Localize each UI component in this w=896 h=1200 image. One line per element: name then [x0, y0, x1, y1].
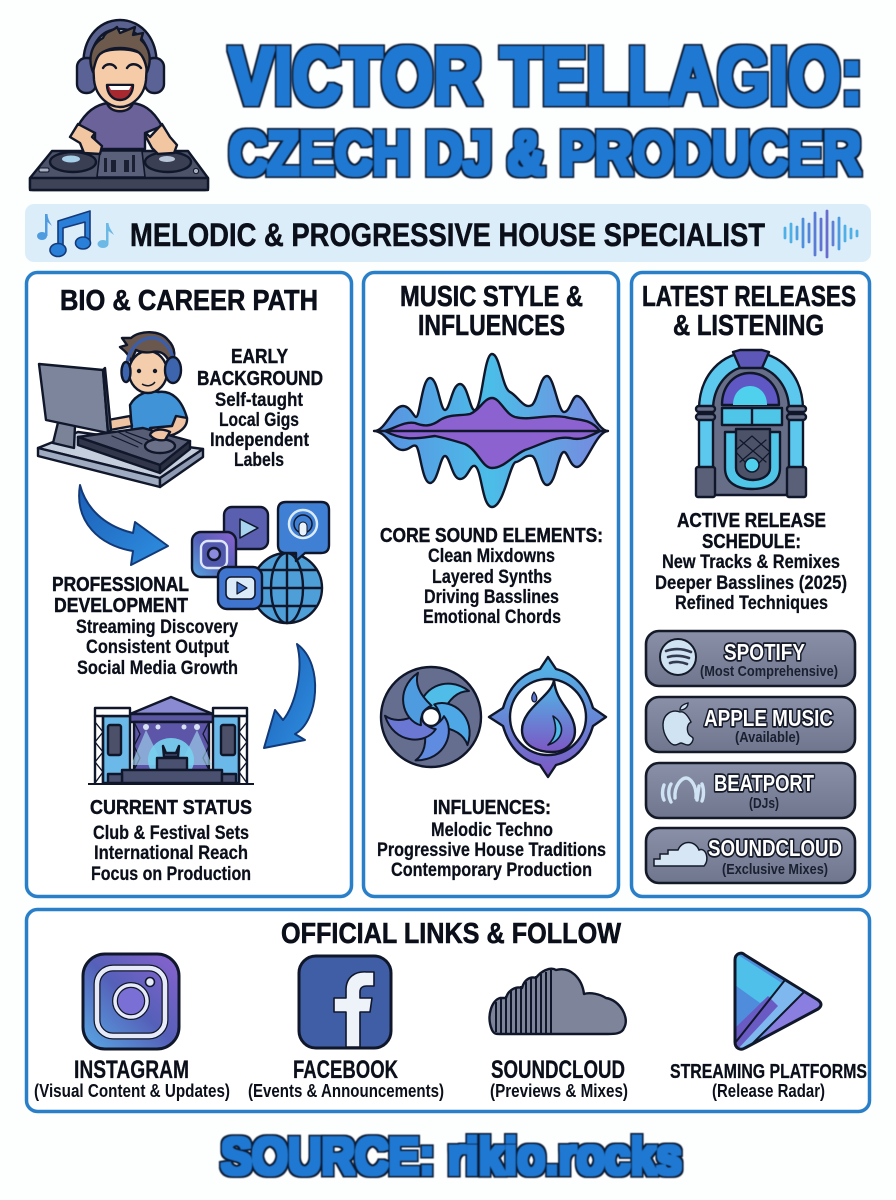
video tile	[218, 567, 262, 609]
icon: beatport	[662, 778, 704, 802]
arms and hands	[70, 124, 177, 154]
active release schedule text: Deeper Basslines (2025)	[655, 573, 847, 594]
early background text	[197, 346, 323, 471]
active release schedule text: Refined Techniques	[675, 593, 828, 614]
link: soundcloud	[490, 969, 628, 1101]
icon: soundcloud	[490, 969, 626, 1034]
current status text	[90, 797, 252, 885]
instagram tile	[192, 532, 236, 577]
core sound elements text: Clean Mixdowns	[428, 546, 555, 567]
professional development text: Social Media Growth	[77, 658, 238, 679]
purple play tile	[224, 507, 268, 549]
button: spotify: (Most Comprehensive)	[700, 663, 838, 680]
active release schedule text: New Tracks & Remixes	[662, 552, 840, 573]
early background text: Local Gigs	[219, 410, 299, 431]
professional development text: DEVELOPMENT	[54, 595, 188, 617]
current status text: Focus on Production	[91, 864, 251, 885]
icon: music notes	[37, 211, 114, 256]
panel: music style and influences	[364, 272, 618, 896]
subtitle: MELODIC & PROGRESSIVE HOUSE SPECIALIST	[130, 217, 765, 253]
panel: official links and follow	[26, 910, 870, 1112]
heading: MUSIC STYLE &	[400, 281, 583, 313]
link: facebook: (Events & Announcements)	[248, 1081, 444, 1101]
link: instagram: INSTAGRAM	[74, 1056, 189, 1084]
icon: instagram	[83, 954, 179, 1049]
icon: social media cluster and globe	[192, 502, 329, 623]
icon: spotify	[660, 639, 696, 675]
headphones	[77, 20, 164, 93]
current status text: International Reach	[94, 843, 248, 864]
title	[229, 31, 863, 188]
icon: play triangle	[734, 952, 822, 1051]
button: apple music	[646, 697, 855, 752]
early background text: EARLY	[231, 346, 289, 368]
professional development text: PROFESSIONAL	[52, 574, 189, 596]
link: streaming platforms: (Release Radar)	[712, 1081, 825, 1101]
button: apple music: (Available)	[735, 729, 800, 746]
current status text: Club & Festival Sets	[93, 823, 249, 844]
icon: facebook	[299, 956, 391, 1048]
core sound elements text: CORE SOUND ELEMENTS:	[380, 525, 603, 547]
influences text	[377, 797, 606, 881]
professional development text	[52, 574, 238, 679]
heading: INFLUENCES	[418, 310, 565, 342]
mixer	[78, 428, 190, 473]
icon: flame emblem	[489, 657, 606, 777]
early background text: Independent	[210, 430, 310, 451]
link: facebook: FACEBOOK	[293, 1056, 398, 1084]
professional development text: Consistent Output	[86, 637, 230, 658]
link: soundcloud: (Previews & Mixes)	[490, 1081, 628, 1101]
hair	[90, 27, 150, 72]
icon: soundcloud	[654, 842, 707, 866]
core sound elements text: Emotional Chords	[423, 607, 561, 628]
heading: & LISTENING	[673, 310, 824, 342]
active release schedule text: SCHEDULE:	[702, 531, 801, 553]
early background text: Labels	[234, 450, 284, 471]
active release schedule text: ACTIVE RELEASE	[677, 510, 826, 532]
link: facebook	[248, 956, 444, 1101]
core sound elements text	[380, 525, 603, 628]
button: beatport: BEATPORT	[714, 770, 814, 796]
subtitle banner	[25, 204, 871, 262]
face	[93, 49, 147, 107]
icon: jukebox	[696, 350, 806, 497]
illustration: festival stage	[88, 697, 254, 784]
neck and shirt	[78, 92, 162, 149]
heading	[400, 281, 583, 342]
icon: apple	[663, 703, 693, 745]
source footer: SOURCE: rikio.rocks	[221, 1128, 682, 1186]
illustration: producer at computer	[38, 332, 203, 487]
button: soundcloud: SOUNDCLOUD	[708, 835, 842, 861]
arrow: early to professional	[79, 485, 168, 565]
icon: sound wave	[785, 211, 857, 257]
button: beatport	[646, 763, 855, 818]
panel: bio and career path	[26, 272, 352, 896]
professional development text: Streaming Discovery	[76, 617, 238, 638]
early background text: BACKGROUND	[197, 368, 323, 390]
influences text: INFLUENCES:	[433, 797, 551, 819]
chart: layered waveform	[374, 354, 608, 507]
icon: DJ character at decks	[30, 20, 208, 190]
button: soundcloud	[646, 828, 855, 883]
monitor	[39, 364, 111, 448]
link: soundcloud: SOUNDCLOUD	[491, 1056, 625, 1084]
link: streaming platforms	[670, 950, 867, 1101]
panel: latest releases and listening	[632, 272, 870, 896]
arrow: professional to current	[264, 644, 315, 748]
globe	[252, 553, 322, 623]
heading: OFFICIAL LINKS & FOLLOW	[281, 918, 622, 950]
button: apple music: APPLE MUSIC	[704, 705, 833, 731]
core sound elements text: Driving Basslines	[424, 587, 559, 608]
link: instagram: (Visual Content & Updates)	[34, 1081, 230, 1101]
button: spotify	[646, 631, 855, 686]
button: spotify: SPOTIFY	[724, 639, 805, 665]
smile	[103, 64, 141, 100]
controller	[30, 151, 208, 190]
early background text: Self-taught	[215, 390, 304, 411]
icon: vinyl swirl	[381, 667, 481, 767]
button: soundcloud: (Exclusive Mixes)	[722, 861, 828, 878]
influences text: Contemporary Production	[391, 860, 592, 881]
heading: BIO & CAREER PATH	[60, 285, 318, 317]
person	[108, 332, 187, 437]
active release schedule text	[655, 510, 847, 614]
current status text: CURRENT STATUS	[90, 797, 252, 819]
influences text: Progressive House Traditions	[377, 840, 606, 861]
podcast bubble	[278, 502, 329, 561]
core sound elements text: Layered Synths	[432, 567, 552, 588]
button: beatport: (DJs)	[749, 795, 779, 812]
heading	[642, 281, 856, 342]
influences text: Melodic Techno	[431, 820, 553, 841]
desk	[38, 432, 203, 487]
link: instagram	[34, 954, 230, 1101]
